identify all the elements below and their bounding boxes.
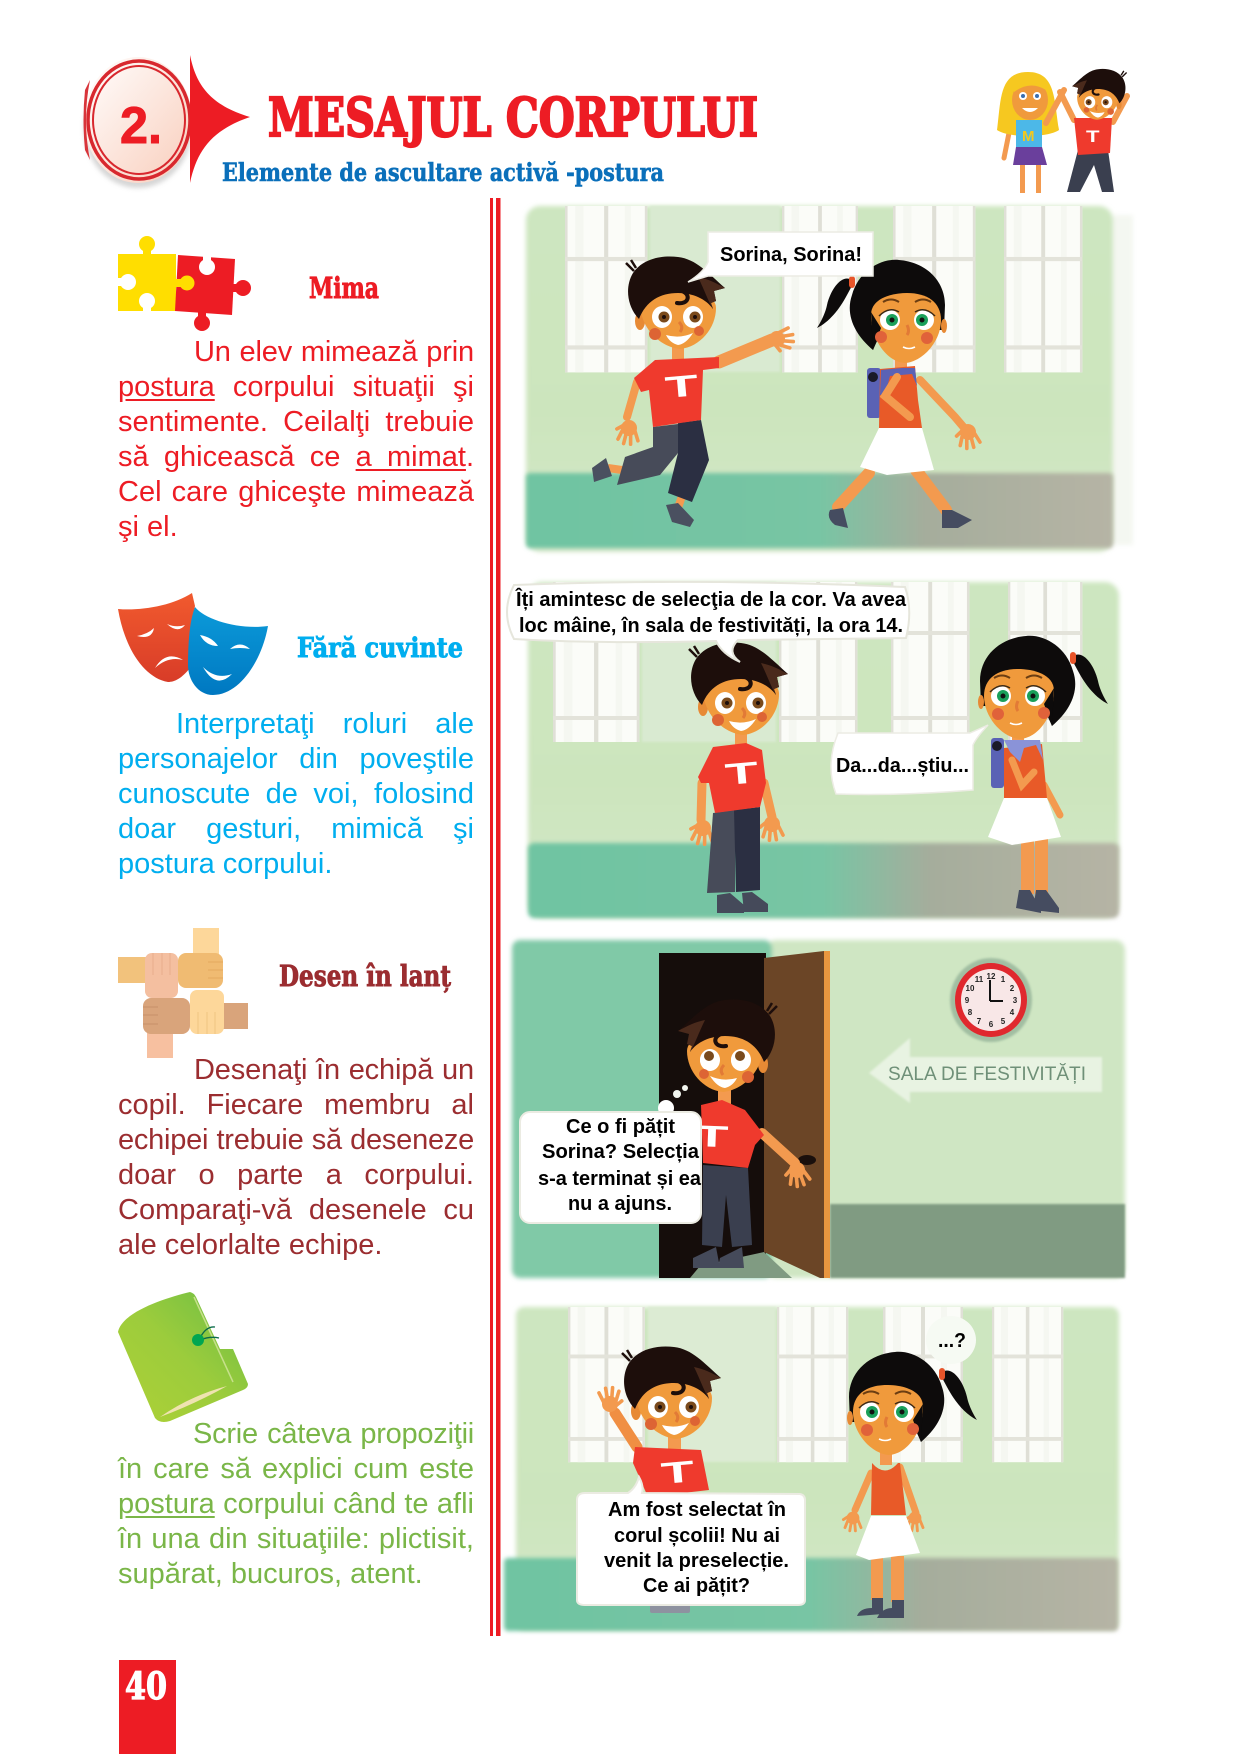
character: boy greeting: T xyxy=(660,1454,696,1491)
wall clock: 1 xyxy=(1001,975,1006,984)
thought bubble ...? xyxy=(926,1316,976,1364)
character: girl facing boy xyxy=(978,636,1108,913)
speech bubble: Sorina, Sorina!: Sorina, Sorina! xyxy=(720,244,862,266)
comic panel 2: reminder about the choir selection xyxy=(507,582,1119,918)
direction arrow sign xyxy=(869,1038,1102,1103)
page number: 40 xyxy=(125,1664,167,1708)
wall clock: 3 xyxy=(1013,996,1018,1005)
wall clock: 7 xyxy=(977,1017,982,1026)
wall clock: 10 xyxy=(966,984,975,993)
text block: Desen în lanț: echipei trebuie să deseneze xyxy=(118,1124,474,1156)
text block: Mima xyxy=(118,336,474,542)
heading: Desen în lanț: Desen în lanț xyxy=(279,959,451,993)
speech bubble: boy reminder xyxy=(507,582,909,662)
icon: theatre masks xyxy=(118,593,268,695)
character: girl Sorina walking xyxy=(817,260,981,528)
text block: Mima: Cel care ghiceşte mimează xyxy=(118,476,474,508)
illustration: two waving children: M xyxy=(1022,128,1034,145)
illustration: two waving children xyxy=(997,69,1127,193)
wall clock: 4 xyxy=(1010,1008,1015,1017)
speech bubble: boy question xyxy=(577,1477,805,1605)
speech bubble: boy reminder: Îți amintesc de selecţia de la cor. Va avea xyxy=(515,587,907,611)
text block: Mima: postura corpului situaţii şi xyxy=(118,370,474,402)
comic panel 3: boy at the door xyxy=(512,940,1125,1278)
comic panel 4: boy meets Sorina xyxy=(504,1307,1119,1631)
wall clock: 8 xyxy=(968,1008,973,1017)
text block: Fără cuvinte: personajelor din poveştile xyxy=(118,742,474,774)
character: boy looking out: T xyxy=(695,1119,729,1154)
character: boy standing: T xyxy=(724,755,760,792)
thought bubble: Ce o fi pățit xyxy=(566,1116,675,1138)
number 2.: 2. xyxy=(120,97,162,155)
text block: Desen în lanț: copil. Fiecare membru al xyxy=(118,1088,474,1120)
text block: Desen în lanț: doar o parte a corpului. xyxy=(118,1158,474,1190)
comic panel 1: boy calls Sorina xyxy=(526,206,1133,552)
icon: four linked hands xyxy=(118,928,248,1058)
heading: Mima: Mima xyxy=(309,271,379,305)
speech bubble: boy question: Ce ai pățit? xyxy=(643,1575,750,1597)
thought bubble: Sorina? Selecția xyxy=(542,1141,700,1163)
wall clock: 12 xyxy=(987,972,996,981)
door and dark doorway xyxy=(659,951,830,1278)
wall clock: 11 xyxy=(975,975,984,984)
thought bubble: s-a terminat și ea xyxy=(538,1168,702,1190)
speech bubble: Da...da...știu... xyxy=(831,725,988,794)
speech bubble: Da...da...știu...: Da...da...știu... xyxy=(836,755,969,777)
subtitle: Elemente de ascultare activă -postura xyxy=(222,158,664,187)
speech bubble: boy question: corul școlii! Nu ai xyxy=(614,1525,780,1547)
text block: Mima: sentimente. Ceilalţi trebuie xyxy=(118,406,474,438)
icon: puzzle pieces xyxy=(116,236,251,331)
speech bubble: boy question: venit la preselecție. xyxy=(604,1550,789,1572)
text block: writing task: Scrie câteva propoziţii xyxy=(193,1418,474,1450)
character: girl confused xyxy=(843,1352,977,1618)
text block: Mima: să ghicească ce a mimat. xyxy=(118,440,474,472)
text block: writing task: în care să explici cum este xyxy=(118,1452,474,1484)
text block: Fără cuvinte xyxy=(118,708,474,880)
direction arrow sign: SALA DE FESTIVITĂȚI xyxy=(888,1064,1086,1085)
text block: Mima: Un elev mimează prin xyxy=(194,336,474,368)
text block: Mima: şi el. xyxy=(118,510,178,542)
text block: Fără cuvinte: postura corpului. xyxy=(118,848,332,880)
thought bubble: nu a ajuns. xyxy=(568,1193,672,1215)
page number tab xyxy=(119,1660,176,1754)
wall clock: 9 xyxy=(965,996,970,1005)
text block: Desen în lanț: ale celorlalte echipe. xyxy=(118,1228,382,1260)
icon: green folder xyxy=(118,1292,248,1422)
title: MESAJUL CORPULUI xyxy=(268,87,758,149)
text block: Fără cuvinte: Interpretaţi roluri ale xyxy=(176,708,474,740)
speech bubble: boy reminder: loc mâine, în sala de festivități, la ora 14. xyxy=(519,615,903,637)
text block: writing task xyxy=(117,1418,474,1590)
text block: Desen în lanț xyxy=(118,1054,474,1260)
wall clock: 6 xyxy=(989,1020,994,1029)
wall clock: 5 xyxy=(1001,1017,1006,1026)
text block: Fără cuvinte: cunoscute de voi, folosind xyxy=(118,778,474,810)
speech bubble: Sorina, Sorina! xyxy=(688,232,873,282)
character: boy looking out xyxy=(678,999,811,1268)
heading: Fără cuvinte: Fără cuvinte xyxy=(297,633,463,664)
decorative double vertical rule xyxy=(490,198,500,1636)
thought bubble xyxy=(520,1085,702,1223)
header arrow xyxy=(190,55,250,183)
character: boy waving: T xyxy=(664,368,700,405)
text block: Desen în lanț: Desenaţi în echipă un xyxy=(194,1054,474,1086)
character: boy greeting xyxy=(599,1346,721,1613)
text block: writing task: în una din situaţiile: plictisit, xyxy=(118,1522,474,1554)
text block: Fără cuvinte: doar gesturi, mimică şi xyxy=(118,812,474,844)
wall clock xyxy=(950,958,1032,1042)
wall clock: 2 xyxy=(1010,984,1015,993)
header badge: lesson number xyxy=(84,57,192,188)
character: boy waving xyxy=(592,256,794,527)
text block: writing task: supărat, bucuros, atent. xyxy=(118,1558,423,1590)
illustration: two waving children: T xyxy=(1086,127,1100,146)
character: boy standing xyxy=(689,642,788,913)
text block: Desen în lanț: Comparaţi-vă desenele cu xyxy=(118,1194,474,1226)
text block: writing task: postura corpului când te afli xyxy=(118,1488,474,1520)
speech bubble: boy question: Am fost selectat în xyxy=(608,1499,786,1521)
thought bubble ...?: ...? xyxy=(938,1330,966,1352)
